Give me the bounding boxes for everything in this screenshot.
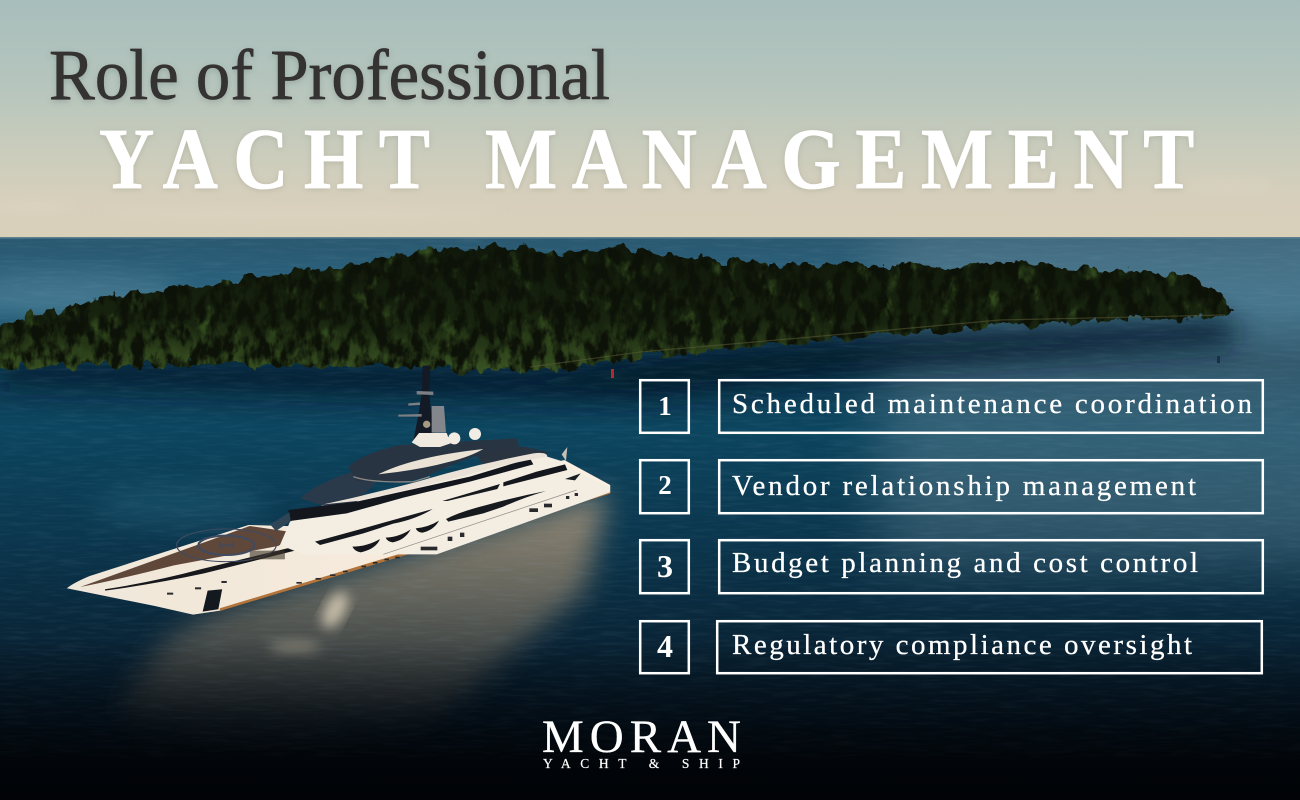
island <box>0 246 1236 372</box>
item 2 <box>640 460 1263 513</box>
channel buoys <box>611 356 1220 378</box>
funnel crest <box>423 421 430 428</box>
anchor recess <box>203 589 222 612</box>
logo: Moran Yacht & Ship: MORAN <box>542 711 741 763</box>
forward stair shade <box>270 512 291 531</box>
item 1: Scheduled maintenance coordination <box>732 388 1252 420</box>
item 4 <box>640 621 1262 673</box>
waterline stripe <box>220 490 610 611</box>
forward glass dome <box>301 472 380 506</box>
title line 2 <box>99 110 1194 207</box>
horizon clouds <box>0 181 1275 220</box>
sky background <box>0 0 1300 238</box>
eyebrow windows <box>352 521 439 552</box>
mast <box>413 366 434 442</box>
island shoreline <box>530 315 1225 367</box>
item 1 <box>640 380 1263 433</box>
item 2: Vendor relationship management <box>732 470 1196 502</box>
radar arms <box>398 391 433 417</box>
helipad markings <box>177 529 276 562</box>
item 4: 4 <box>657 628 673 664</box>
third deck white <box>323 453 547 504</box>
water ripples <box>0 238 1300 758</box>
side trim line <box>383 490 577 554</box>
white deck mass <box>280 453 610 554</box>
upper glass dome <box>348 438 519 482</box>
second deck aft windows <box>503 464 567 486</box>
item 3 <box>640 540 1263 593</box>
aft slit windows <box>442 484 546 522</box>
sun deck aft shade <box>477 447 550 465</box>
dark lower water <box>0 640 1300 800</box>
mast base <box>412 433 451 447</box>
sea background <box>0 215 1300 800</box>
title line 1: Role of Professional <box>49 35 610 115</box>
title line 2: MANAGEMENT <box>485 110 1194 207</box>
item 2: 2 <box>658 470 672 500</box>
list: management roles <box>640 380 1263 673</box>
foredeck shadow line <box>105 530 369 591</box>
item 4: Regulatory compliance oversight <box>732 629 1192 661</box>
radomes <box>448 428 481 444</box>
title line 2: YACHT <box>99 110 430 207</box>
sun deck <box>378 449 483 474</box>
yacht name <box>250 551 285 559</box>
main deck windows <box>315 509 433 545</box>
item 3: 3 <box>657 548 673 584</box>
deck windows band <box>288 458 533 521</box>
funnel <box>432 406 446 433</box>
yacht reflection on water <box>115 492 608 755</box>
portholes <box>167 557 400 595</box>
item 1: 1 <box>658 391 672 421</box>
aft windows <box>421 493 578 550</box>
stern shade <box>565 473 581 480</box>
stern flag <box>562 447 567 461</box>
item 3: Budget planning and cost control <box>732 547 1198 579</box>
island reflection <box>0 318 1240 400</box>
helicopter deck <box>80 526 301 587</box>
hull body <box>67 460 610 615</box>
superstructure <box>270 366 610 554</box>
sun deck rail <box>353 477 430 482</box>
yacht bow and hull <box>67 460 610 615</box>
logo: Moran Yacht & Ship: YACHT & SHIP <box>543 756 740 771</box>
yacht <box>67 366 610 615</box>
horizon line <box>0 237 1300 238</box>
